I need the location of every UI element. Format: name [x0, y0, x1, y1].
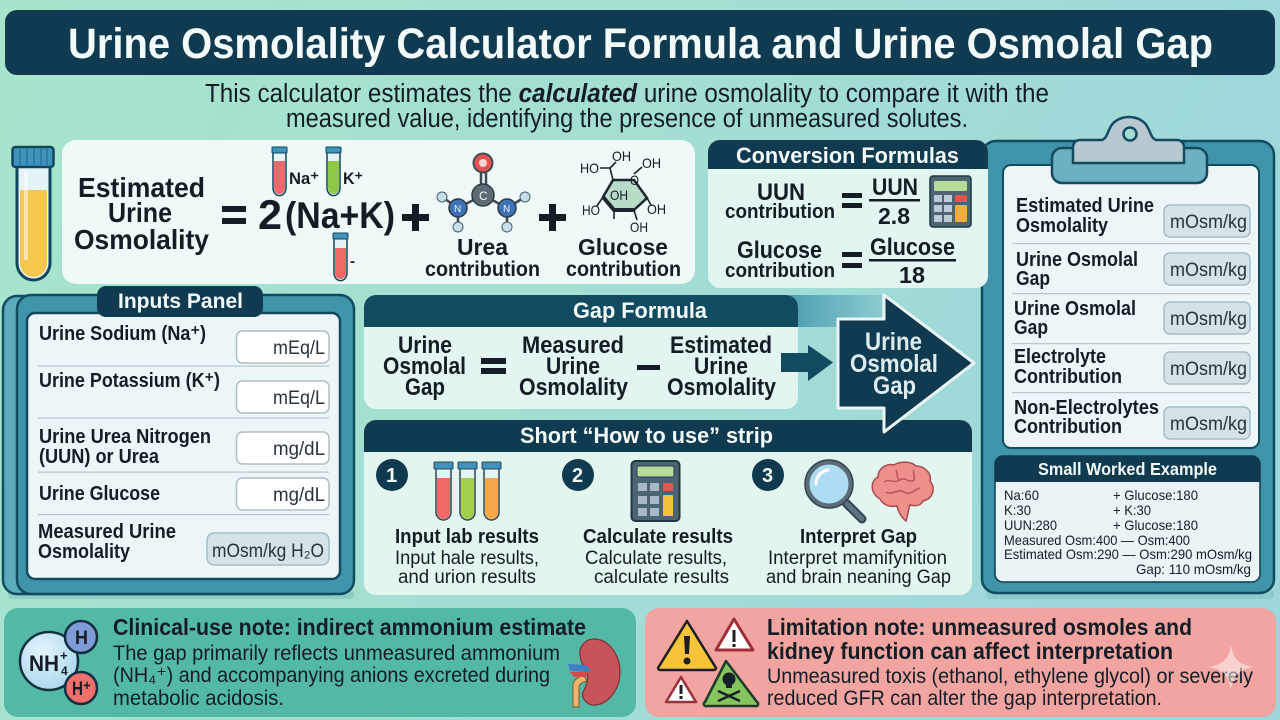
arrow: formula to gap	[781, 345, 833, 381]
electrolyte term: (Na+K)	[285, 195, 395, 236]
input row: measured osmolality: mOsm/kg H₂O	[212, 541, 324, 562]
measured term: Urine	[546, 353, 600, 380]
icon: ammonium molecule: +	[60, 648, 68, 663]
output row: osmolal gap: Gap	[1016, 268, 1050, 290]
step 1 text: Input lab results	[395, 526, 539, 548]
input row: glucose: Urine Glucose	[39, 483, 160, 505]
input row: measured osmolality	[38, 521, 329, 565]
subtitle	[205, 80, 1049, 133]
step 3 number	[752, 459, 784, 491]
input row: sodium	[39, 323, 329, 363]
output row: osmolal gap: mOsm/kg	[1170, 260, 1247, 281]
measured term	[519, 332, 629, 401]
panel: estimated osmolality formula	[62, 140, 695, 284]
arrow: urine osmolal gap result: Osmolal	[850, 350, 938, 378]
icon: ammonium molecule: H⁺	[72, 679, 91, 700]
minus sign	[637, 365, 660, 370]
input row: urea nitrogen: Urine Urea Nitrogen	[39, 426, 211, 448]
input row: potassium	[39, 370, 329, 413]
icon: Na tube: Na⁺	[289, 169, 319, 188]
input row: potassium: mEq/L	[273, 388, 325, 409]
formula label: Osmolality	[74, 224, 209, 255]
input row: sodium: mEq/L	[273, 338, 325, 359]
panel: small worked example: K:30	[1004, 502, 1031, 518]
electrolyte term: 2	[258, 191, 282, 238]
icon: glucose ring: OH	[612, 148, 631, 164]
step 3 text: and brain neaning Gap	[766, 567, 951, 588]
icon: glucose ring: OH	[630, 219, 648, 235]
icon: lower tube	[333, 233, 355, 281]
formula label: Estimated	[78, 172, 205, 203]
panel: small worked example: Small Worked Example	[1038, 459, 1217, 479]
output row: electrolyte contribution: Electrolyte	[1014, 346, 1106, 368]
limitation note heading: kidney function can affect interpretation	[767, 638, 1173, 664]
measured term: Osmolality	[519, 374, 629, 401]
input row: urea nitrogen: (UUN) or Urea	[39, 446, 160, 468]
panel: small worked example: Estimated Osm:290 — Osm:290 mOsm/kg	[1004, 546, 1252, 562]
estimated term: Osmolality	[667, 374, 777, 401]
step 2 number	[562, 459, 594, 491]
icon: ammonium molecule: H	[75, 628, 88, 649]
input row: measured osmolality: Osmolality	[38, 541, 131, 563]
icon: urea molecule	[437, 154, 530, 232]
icon: urea molecule: N	[503, 204, 510, 215]
UUN formula: 2.8	[878, 203, 910, 229]
panel: how to use strip: Short “How to use” strip	[520, 423, 773, 448]
icon: glucose ring: HO	[582, 202, 600, 218]
icon: glucose ring: OH	[642, 155, 661, 171]
icon: glucose ring: HO	[580, 160, 599, 176]
step 1 number	[376, 459, 408, 491]
panel: how to use strip	[364, 420, 972, 595]
panel: small worked example	[995, 456, 1260, 582]
step 3 text: Interpret Gap	[800, 526, 917, 548]
glucose formula: Glucose	[870, 234, 955, 261]
formula label	[74, 172, 209, 255]
input row: glucose: mg/dL	[273, 485, 325, 506]
UUN formula: UUN	[872, 174, 918, 201]
clinical note body: metabolic acidosis.	[113, 687, 284, 710]
icon: sparkle watermark	[1208, 645, 1254, 690]
output row: osmolal gap repeat: Gap	[1014, 317, 1048, 339]
panel: small worked example: UUN:280	[1004, 517, 1057, 533]
panel: small worked example: + K:30	[1113, 502, 1151, 518]
UUN formula: contribution	[725, 201, 835, 223]
panel: clipboard outputs	[982, 117, 1274, 593]
icon: calculator	[930, 176, 971, 227]
icon: K tube	[326, 147, 363, 196]
step 1 text	[395, 526, 539, 588]
equals sign	[481, 358, 506, 374]
icon: ammonium molecule: 4	[61, 664, 68, 678]
panel: small worked example: + Glucose:180	[1113, 517, 1198, 533]
gap term: Urine	[398, 332, 452, 359]
step 1 text: Input hale results,	[395, 548, 539, 569]
icon: glucose ring: OH	[610, 187, 628, 203]
output row: estimated osmolality	[1016, 195, 1250, 237]
glucose label	[566, 234, 681, 281]
glucose label: contribution	[566, 258, 681, 281]
gap term: Osmolal	[383, 353, 466, 380]
arrow: urine osmolal gap result	[838, 295, 974, 432]
panel: conversion formulas: Conversion Formulas	[736, 143, 959, 168]
subtitle: This calculator estimates the calculated urine osmolality to compare it with the	[205, 80, 1049, 108]
input row: urea nitrogen: mg/dL	[273, 439, 325, 460]
urea label	[425, 234, 540, 281]
icon: Na tube	[272, 147, 319, 196]
limitation note body: reduced GFR can alter the gap interpretation.	[767, 687, 1162, 710]
title: Urine Osmolality Calculator Formula and Urine Osmolal Gap	[68, 20, 1213, 68]
icon: ammonium molecule: NH	[29, 651, 59, 676]
output row: estimated osmolality: mOsm/kg	[1170, 212, 1247, 233]
output row: estimated osmolality: Estimated Urine	[1016, 195, 1154, 217]
icon: K tube: K⁺	[343, 169, 363, 188]
icon: kidney	[568, 639, 620, 707]
limitation note body: Unmeasured toxis (ethanol, ethylene glycol) or severely	[767, 665, 1253, 688]
step 3 number: 3	[762, 465, 773, 487]
input row: glucose	[39, 478, 329, 510]
step 2 text: calculate results	[594, 567, 729, 588]
step 2 text: Calculate results	[583, 526, 733, 548]
icon: urea molecule: N	[454, 204, 461, 215]
panel: gap formula	[364, 295, 882, 409]
panel: small worked example: Gap: 110 mOsm/kg	[1136, 561, 1251, 577]
output row: electrolyte contribution	[1014, 346, 1250, 388]
output row: non-electrolyte contribution: Contribution	[1014, 416, 1122, 438]
electrolyte term	[258, 191, 395, 238]
icon: glucose ring	[580, 148, 666, 235]
estimated term: Estimated	[670, 332, 772, 359]
limitation note body	[767, 665, 1253, 710]
panel: small worked example: + Glucose:180	[1113, 487, 1198, 503]
glucose formula: contribution	[725, 260, 835, 282]
output row: non-electrolyte contribution	[1014, 397, 1250, 439]
step 3 text	[766, 526, 951, 588]
output row: osmolal gap	[1016, 249, 1250, 290]
input row: urea nitrogen	[39, 426, 329, 468]
inputs panel heading	[97, 286, 263, 317]
UUN formula: UUN	[757, 179, 805, 206]
icon: warning triangles	[658, 619, 758, 706]
step 2 text	[583, 526, 733, 588]
step 2 text: Calculate results,	[585, 548, 727, 569]
input row: measured osmolality: Measured Urine	[38, 521, 176, 543]
urea label: contribution	[425, 258, 540, 281]
panel: limitation note	[645, 608, 1276, 717]
output row: non-electrolyte contribution: Non-Electrolytes	[1014, 397, 1159, 419]
urea label: Urea	[457, 234, 508, 260]
icon: large urine test tube	[12, 147, 54, 280]
arrow: urine osmolal gap result: Gap	[873, 372, 916, 400]
clinical note heading: Clinical-use note: indirect ammonium estimate	[113, 614, 586, 640]
step 3 text: Interpret mamifynition	[768, 548, 947, 569]
icon: three tubes	[434, 462, 501, 520]
clinical note body: The gap primarily reflects unmeasured ammonium	[113, 642, 560, 665]
glucose formula: 18	[899, 262, 925, 288]
equals sign	[222, 206, 246, 224]
panel: inputs	[3, 286, 354, 594]
panel: gap formula: Gap Formula	[573, 298, 708, 323]
icon: brain	[872, 462, 933, 521]
measured term: Measured	[522, 332, 624, 359]
subtitle: measured value, identifying the presence of unmeasured solutes.	[286, 105, 968, 133]
title	[5, 10, 1275, 75]
UUN formula	[725, 174, 920, 229]
panel: conversion formulas	[708, 140, 988, 288]
icon: magnifying glass	[805, 460, 862, 519]
limitation note heading	[767, 614, 1192, 664]
input row: potassium: Urine Potassium (K⁺)	[39, 370, 220, 392]
icon: glucose ring: OH	[647, 201, 666, 217]
glucose label: Glucose	[578, 234, 668, 260]
glucose formula	[725, 234, 956, 288]
icon: calculator	[632, 461, 680, 521]
inputs panel heading: Inputs Panel	[118, 290, 243, 313]
panel: clinical-use note	[4, 608, 636, 717]
step 1 number: 1	[386, 465, 397, 487]
gap term	[383, 332, 466, 401]
output row: electrolyte contribution: mOsm/kg	[1170, 359, 1247, 380]
formula label: Urine	[108, 197, 172, 228]
icon: urea molecule: C	[479, 189, 488, 203]
input row: sodium: Urine Sodium (Na⁺)	[39, 323, 206, 345]
icon: clipboard clip	[1052, 117, 1207, 183]
panel: small worked example: Na:60	[1004, 487, 1039, 503]
output row: estimated osmolality: Osmolality	[1016, 215, 1109, 237]
output row: osmolal gap repeat: Urine Osmolal	[1014, 298, 1136, 320]
clinical note body: (NH₄⁺) and accompanying anions excreted during	[113, 664, 550, 687]
output row: non-electrolyte contribution: mOsm/kg	[1170, 414, 1247, 435]
plus sign	[402, 204, 429, 231]
icon: glucose ring: O	[630, 172, 639, 188]
icon: lower tube: -	[350, 253, 355, 270]
icon: ammonium molecule	[20, 621, 97, 704]
step 2 number: 2	[572, 465, 583, 487]
plus sign	[539, 204, 566, 231]
output row: osmolal gap repeat: mOsm/kg	[1170, 309, 1247, 330]
glucose formula: Glucose	[737, 237, 822, 264]
limitation note heading: Limitation note: unmeasured osmoles and	[767, 614, 1192, 640]
output row: electrolyte contribution: Contribution	[1014, 366, 1122, 388]
clinical note body	[113, 642, 560, 710]
panel: small worked example: Measured Osm:400 — Osm:400	[1004, 532, 1190, 548]
step 1 text: and urion results	[398, 567, 536, 588]
arrow: urine osmolal gap result: Urine	[865, 328, 922, 356]
output row: osmolal gap: Urine Osmolal	[1016, 249, 1138, 271]
output row: osmolal gap repeat	[1014, 298, 1250, 339]
estimated term	[667, 332, 777, 401]
gap term: Gap	[405, 374, 445, 401]
estimated term: Urine	[694, 353, 748, 380]
